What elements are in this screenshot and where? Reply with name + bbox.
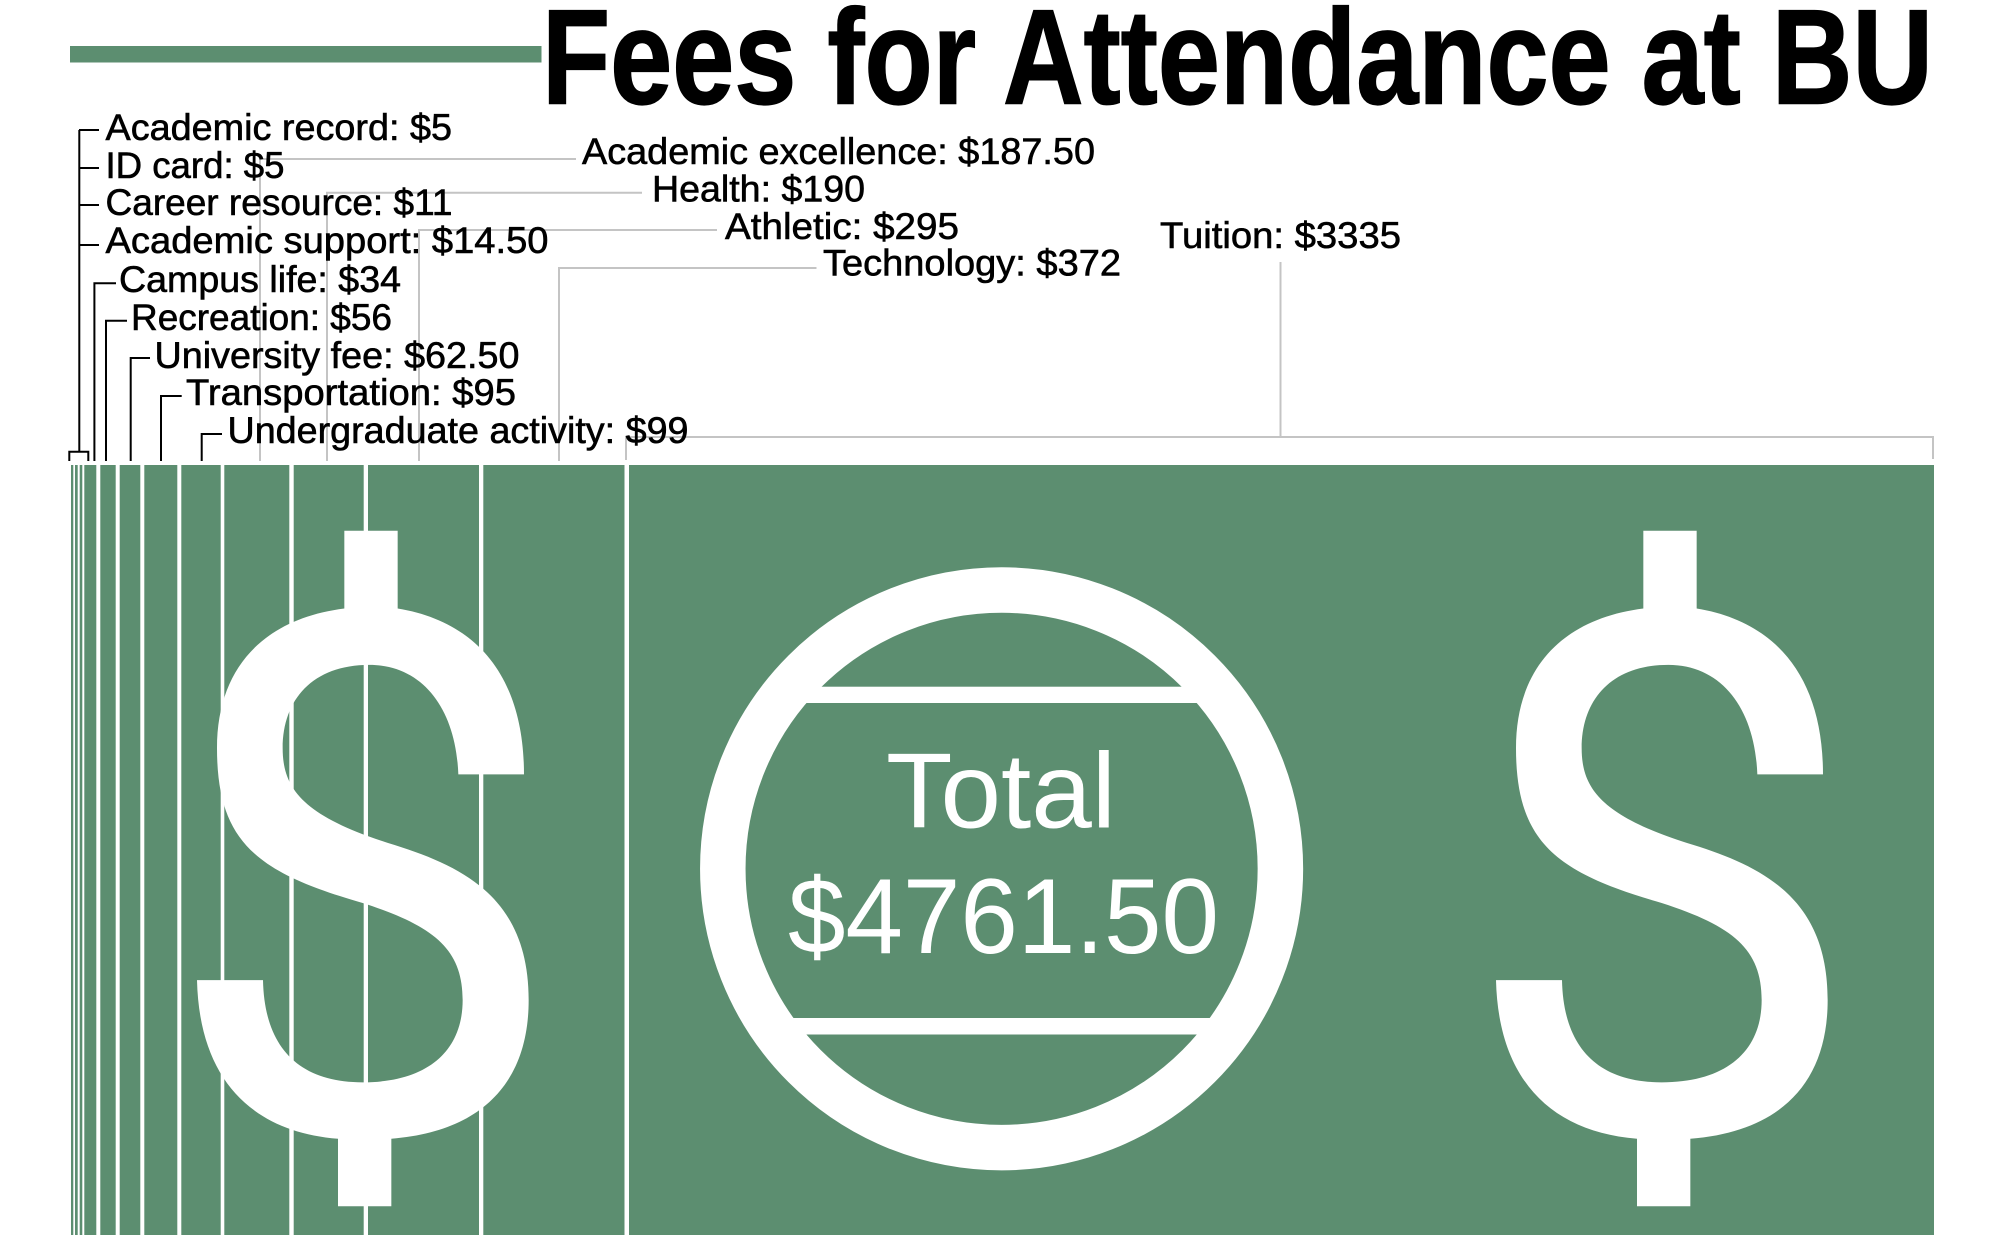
bar: recreation <box>100 465 116 1235</box>
bar: undergraduate activity <box>181 465 221 1235</box>
label: transportation: Transportation: $95 <box>186 372 516 413</box>
label: health: Health: $190 <box>652 169 865 210</box>
label: academic support: Academic support: $14.50 <box>106 220 548 261</box>
label: undergraduate activity: Undergraduate activity: $99 <box>228 410 688 451</box>
label: academic record: Academic record: $5 <box>106 107 452 148</box>
bar: health <box>294 465 364 1235</box>
bar: tuition <box>629 465 1934 1235</box>
label: academic excellence: Academic excellence: $187.50 <box>582 131 1095 172</box>
label: tuition: Tuition: $3335 <box>1160 215 1401 256</box>
label: campus life: Campus life: $34 <box>119 259 401 300</box>
label: health <box>327 169 865 461</box>
label: technology: Technology: $372 <box>823 243 1121 284</box>
bar: career resource <box>75 465 78 1235</box>
label: academic excellence <box>260 131 1095 461</box>
label: transportation <box>161 372 516 461</box>
total label: Total <box>886 731 1116 851</box>
label: recreation <box>106 297 392 461</box>
bar: transportation <box>144 465 177 1235</box>
label: career resource: Career resource: $11 <box>106 182 452 223</box>
label: university fee: University fee: $62.50 <box>154 335 520 376</box>
bar: academic support <box>80 465 82 1235</box>
label: campus life <box>94 259 401 461</box>
bar: technology <box>483 465 624 1235</box>
label: recreation: Recreation: $56 <box>131 297 392 338</box>
label: athletic <box>419 206 959 461</box>
label: ID card: ID card: $5 <box>106 145 284 186</box>
bar: university fee <box>120 465 140 1235</box>
label: university fee <box>131 335 519 461</box>
bar: academic record and ID card <box>71 465 73 1235</box>
bar: campus life <box>84 465 96 1235</box>
label: tuition <box>626 215 1933 460</box>
icon: right dollar sign <box>1496 531 1828 1206</box>
bar: academic excellence <box>224 465 289 1235</box>
label: athletic: Athletic: $295 <box>725 206 959 247</box>
treemap of fees <box>71 465 1934 1235</box>
icon: central bill medallion ring <box>723 590 1280 1148</box>
label: technology <box>559 243 1121 461</box>
bracket: smallest fees <box>69 130 88 461</box>
icon: left dollar sign <box>197 531 529 1206</box>
title accent bar <box>70 46 542 62</box>
bar: athletic <box>368 465 479 1235</box>
total amount: $4761.50 <box>788 856 1219 976</box>
